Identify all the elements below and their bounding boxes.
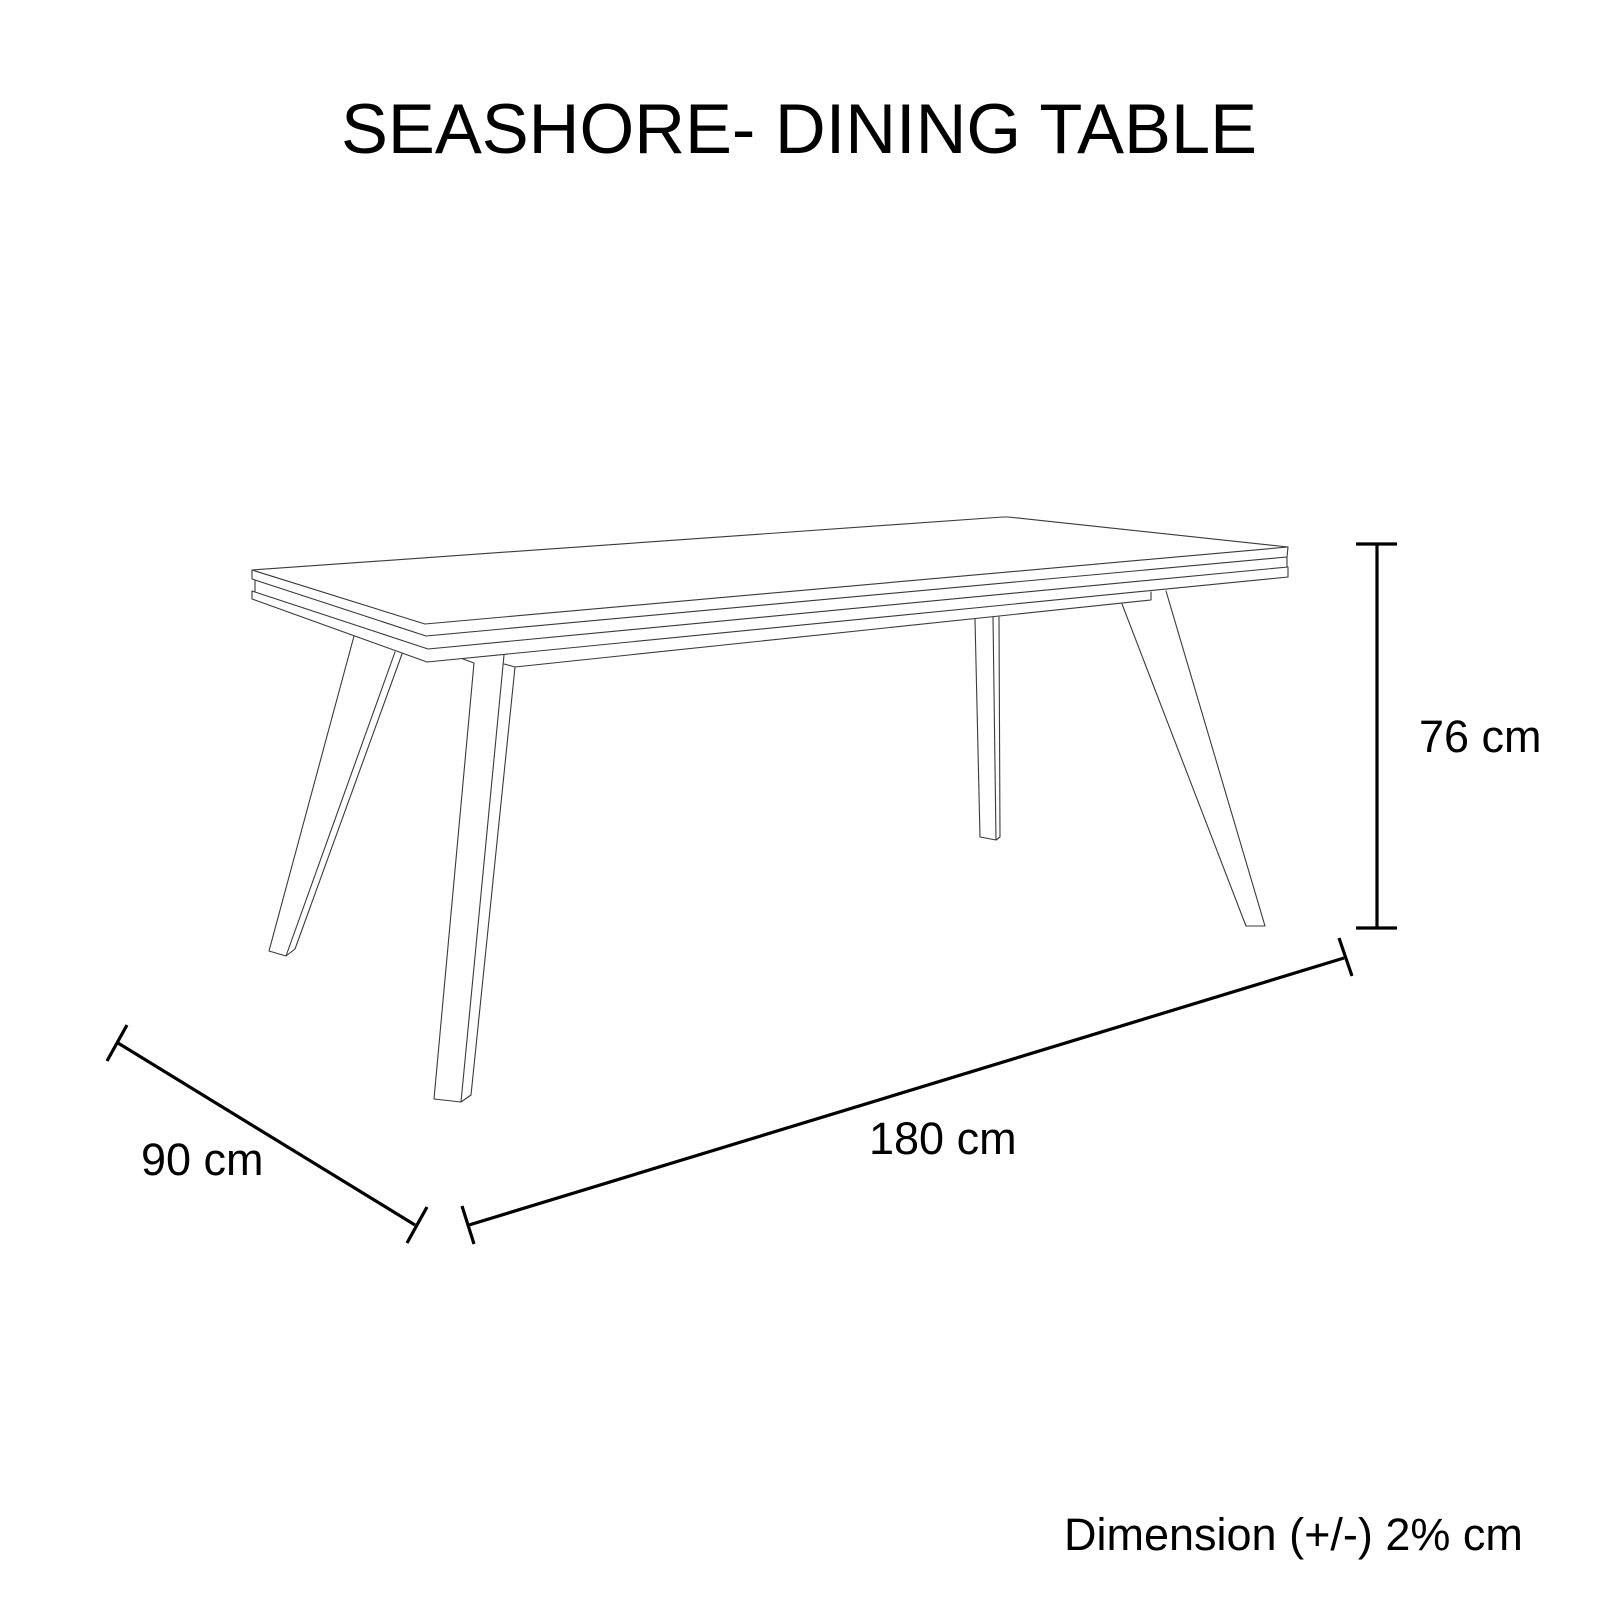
left front leg	[269, 636, 402, 956]
front corner leg	[434, 655, 515, 1102]
back leg	[975, 617, 1000, 840]
dimension label: 90 cm: 90 cm	[141, 1134, 264, 1185]
apron	[504, 592, 1151, 667]
tolerance note: Dimension (+/-) 2% cm	[1064, 1509, 1523, 1560]
table top surface	[252, 517, 1288, 624]
title: SEASHORE- DINING TABLE	[341, 89, 1257, 168]
dimension: height	[1356, 544, 1397, 928]
table top edge layers	[252, 547, 1288, 662]
dimension label: 76 cm: 76 cm	[1419, 711, 1542, 762]
table line drawing	[252, 517, 1288, 1102]
dimension: length	[462, 938, 1352, 1244]
right leg	[1122, 591, 1265, 926]
dimension label: 180 cm: 180 cm	[869, 1113, 1017, 1164]
dimension: width	[107, 1025, 427, 1243]
